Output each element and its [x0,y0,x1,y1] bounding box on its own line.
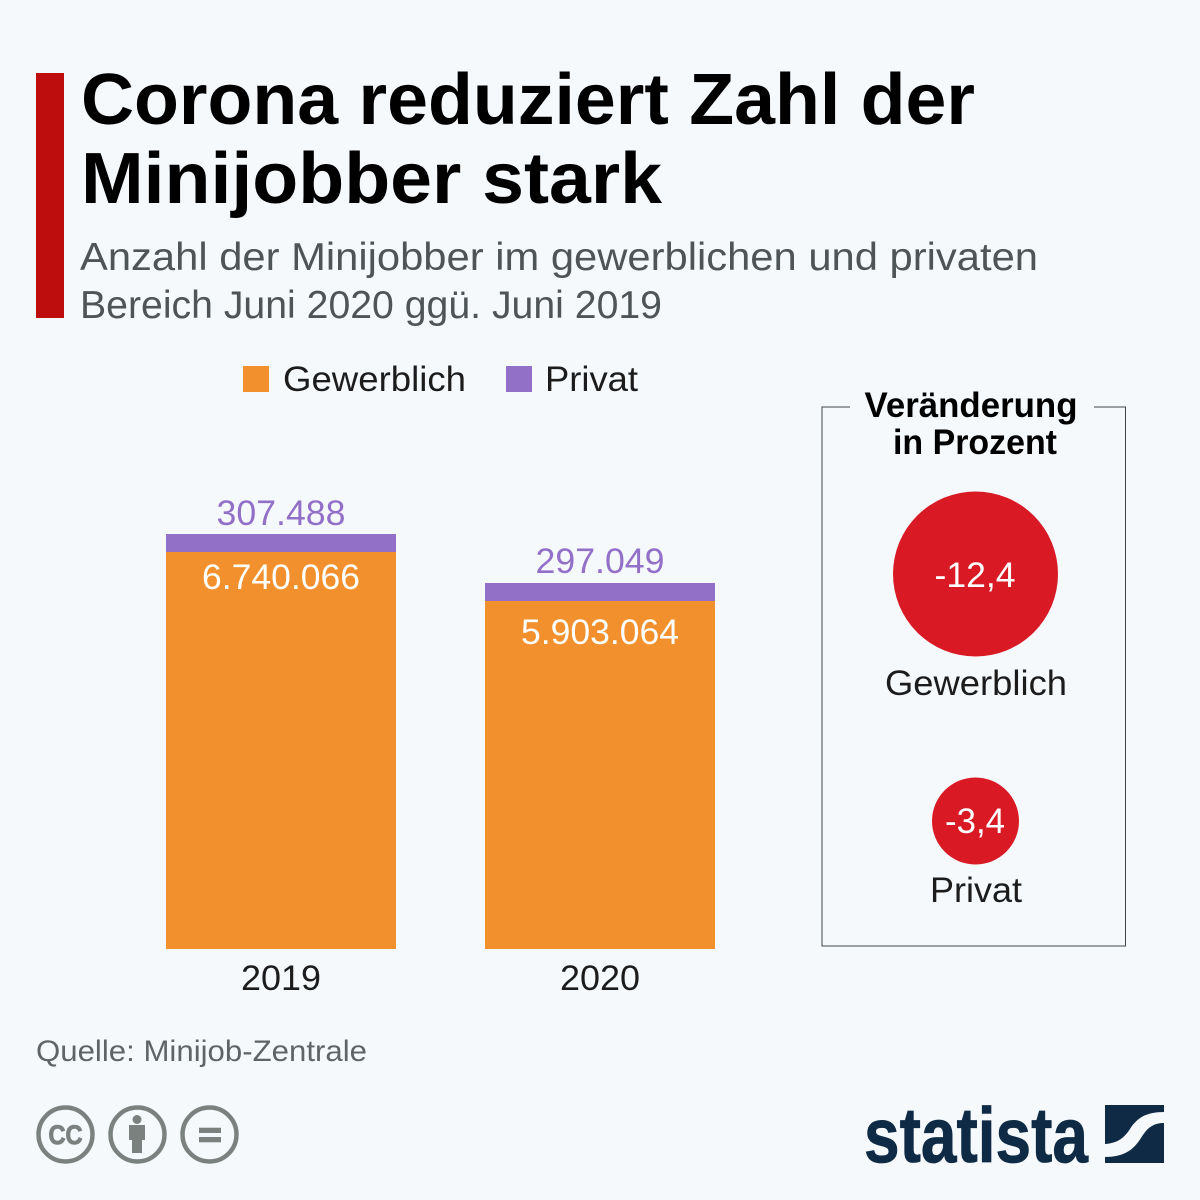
subtitle [80,236,1038,327]
circle: Privat: Privat [930,871,1022,910]
circle: Gewerblich: -12,4 [934,556,1016,595]
panel heading: in Prozent [893,423,1057,462]
icon: CC [38,1108,92,1162]
accent bar [36,73,64,318]
legend: Gewerblich [283,360,466,399]
bar 2020: 297.049 [536,542,664,581]
title: Minijobber stark [81,139,663,219]
circle: Privat [930,778,1022,910]
bar 2019: 6.740.066 [202,558,360,597]
panel heading: Veränderung [864,386,1078,425]
bar 2019: 2019 [241,959,321,998]
source: Quelle: Minijob-Zentrale [36,1035,367,1068]
title: Corona reduziert Zahl der [81,60,975,140]
bar 2019: 307.488 [216,494,346,533]
circle: Gewerblich: Gewerblich [885,664,1067,703]
circle: Gewerblich [885,492,1067,703]
subtitle: Anzahl der Minijobber im gewerblichen und privaten [80,236,1038,279]
bar chart [166,494,715,998]
bar 2020: 2020 [560,959,640,998]
icon: no derivatives [182,1108,236,1162]
bar 2019 [166,494,396,998]
bar 2020 [485,542,715,998]
icon: attribution [110,1108,164,1162]
icon: CC: CC [48,1120,82,1150]
icon: statista mark [1105,1105,1164,1144]
panel heading [864,386,1078,462]
bar 2020: 5.903.064 [521,613,679,652]
logo: statista: statista [864,1091,1088,1179]
subtitle: Bereich Juni 2020 ggü. Juni 2019 [80,284,662,327]
circle: Privat: -3,4 [945,802,1005,841]
legend [243,360,638,399]
panel: change in percent [822,386,1126,946]
legend: Privat [545,360,638,399]
title [81,60,975,219]
